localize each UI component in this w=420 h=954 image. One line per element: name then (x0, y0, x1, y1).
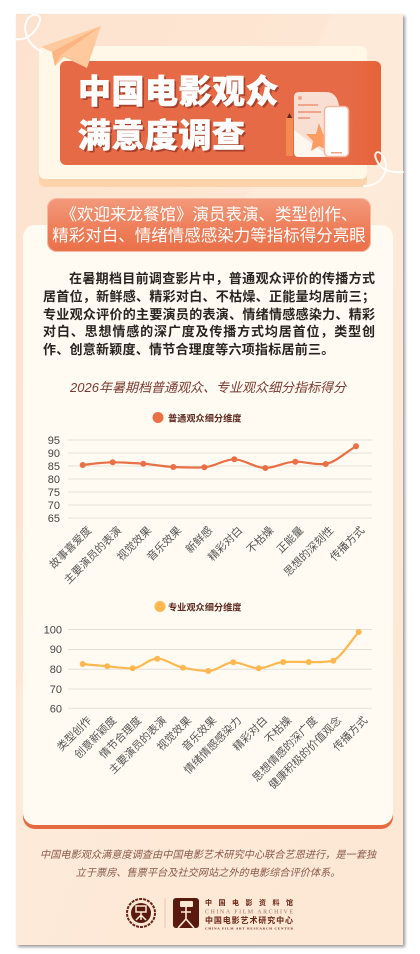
subtitle banner (47, 198, 371, 252)
body paragraph (43, 271, 375, 357)
title card backing (39, 46, 367, 179)
chart: professional audience (44, 601, 372, 792)
y axis labels: 70 (48, 500, 60, 512)
subtitle banner: 精彩对白、情绪情感感染力等指标得分亮眼 (52, 226, 366, 244)
body paragraph: 作、创意新颖度、情节合理度等六项指标居前三。 (43, 342, 335, 357)
footer note: 中国电影观众满意度调查由中国电影艺术研究中心联合艺恩进行，是一套独 (40, 850, 376, 861)
y axis labels: 75 (48, 487, 60, 499)
x axis labels: 故事喜爱度 (46, 523, 94, 571)
title: 中国电影观众 (78, 73, 279, 110)
x axis labels: 思想的深刻性 (280, 523, 336, 579)
y axis labels (48, 435, 60, 525)
x axis labels (54, 713, 370, 792)
logo text: CHINA FILM ARCHIVE (205, 910, 293, 916)
line series (80, 629, 362, 674)
logo text: 中国电影艺术研究中心 (205, 915, 293, 925)
x axis labels: 视觉效果 (154, 713, 194, 754)
x axis labels: 音乐效果 (144, 523, 184, 564)
x axis labels: 健康积极的价值观念 (266, 713, 344, 792)
y axis labels: 95 (48, 435, 60, 447)
legend: professional audience: 专业观众细分维度 (168, 602, 242, 612)
subtitle banner: 《欢迎来龙餐馆》演员表演、类型创作、 (60, 206, 358, 224)
main content panel (23, 225, 393, 825)
icon: document, phone, star, pencil (286, 92, 348, 157)
chart: general audience (46, 412, 372, 587)
x axis labels: 主要演员的表演 (61, 523, 124, 587)
chart title: 2026年暑期档普通观众、专业观众细分指标得分 (70, 380, 346, 395)
body paragraph: 居首位，新鲜感、精彩对白、不枯燥、正能量均居前三； (43, 289, 375, 304)
icon: research center logo (173, 898, 199, 928)
x axis labels: 情节合理度 (96, 713, 144, 761)
body paragraph: 对白、思想情感的深广度及传播方式均居首位，类型创 (43, 324, 375, 339)
y axis labels: 90 (48, 448, 60, 460)
x axis labels: 思想情感的深广度 (249, 713, 320, 784)
y axis labels: 85 (48, 461, 60, 473)
logo text: 中国电影资料馆 (205, 898, 293, 907)
x axis labels: 主要演员的表演 (106, 713, 169, 777)
x axis labels: 不枯燥 (261, 713, 294, 746)
x axis labels: 精彩对白 (205, 523, 245, 564)
footer note (40, 849, 377, 879)
body paragraph: 在暑期档目前调查影片中，普通观众评价的传播方式 (69, 271, 375, 286)
logo text: CHINA FILM ART RESEARCH CENTER (205, 926, 293, 930)
y axis labels: 60 (50, 704, 62, 716)
x axis labels: 视觉效果 (114, 523, 154, 564)
x axis labels: 创意新颖度 (71, 713, 119, 761)
x axis labels: 传播方式 (330, 713, 370, 754)
x axis labels: 音乐效果 (179, 713, 219, 754)
y axis labels: 80 (50, 664, 62, 676)
y axis labels: 80 (48, 474, 60, 486)
footer note: 立于票房、售票平台及社交网站之外的电影综合评价体系。 (76, 868, 340, 879)
x axis labels: 正能量 (273, 523, 306, 556)
x axis labels: 新鲜感 (182, 523, 215, 556)
y axis labels: 100 (44, 624, 62, 636)
title: 满意度调查 (78, 117, 246, 154)
decorations: paper plane and swirls (16, 14, 404, 187)
x axis labels: 情绪情感感染力 (181, 713, 244, 777)
logo text (205, 898, 293, 930)
x axis labels (46, 523, 367, 587)
x axis labels: 类型创作 (54, 713, 94, 754)
x axis labels: 不枯燥 (243, 523, 276, 556)
legend: general audience: 普通观众细分维度 (168, 412, 242, 424)
y axis labels (44, 624, 62, 716)
y axis labels: 65 (48, 513, 60, 525)
y axis labels: 90 (50, 644, 62, 656)
x axis labels: 精彩对白 (230, 713, 270, 754)
x axis labels: 传播方式 (327, 523, 367, 564)
title card (60, 61, 381, 165)
line series (80, 443, 359, 471)
icon: film archive emblem (127, 899, 155, 927)
y axis labels: 70 (50, 684, 62, 696)
logos (126, 898, 293, 930)
title (78, 73, 280, 154)
body paragraph: 专业观众评价的主要演员的表演、情绪情感感染力、精彩 (43, 307, 375, 322)
